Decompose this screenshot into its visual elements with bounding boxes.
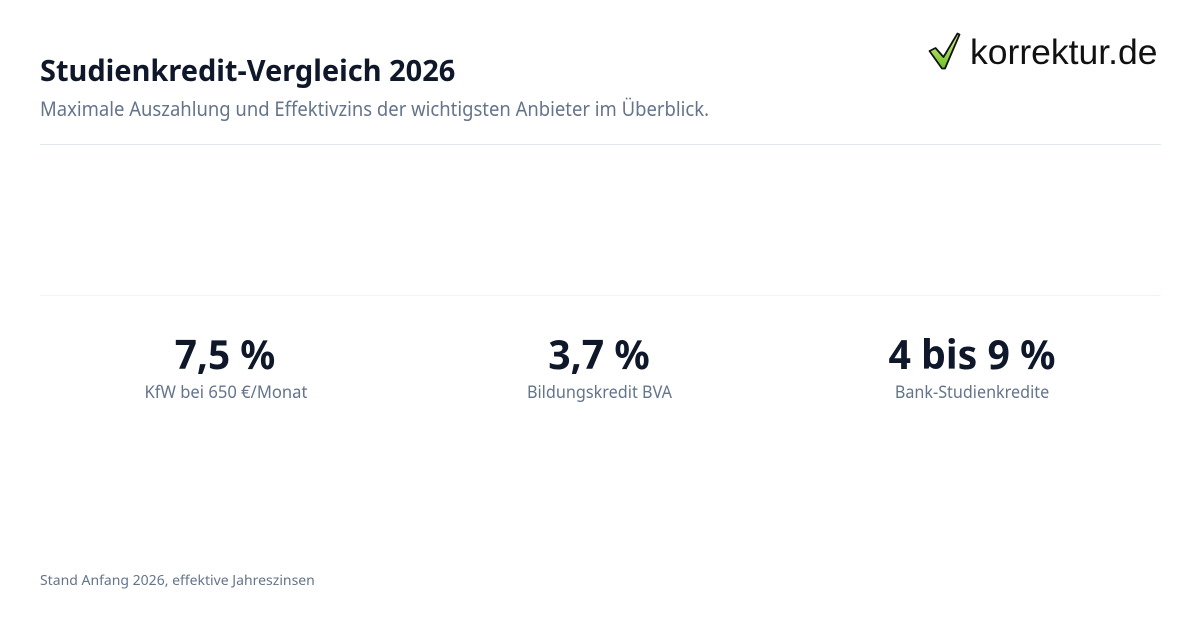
stat label: Bildungskredit BVA — [527, 380, 672, 403]
subtitle: Maximale Auszahlung und Effektivzins der wichtigsten Anbieter im Überblick. — [40, 95, 709, 122]
stat value: 4 bis 9 % — [889, 326, 1055, 381]
stat: Banks — [889, 326, 1055, 403]
stat value: 3,7 % — [548, 326, 650, 381]
logo wordmark: korrektur.de — [970, 32, 1157, 72]
stat value: 7,5 % — [175, 326, 275, 381]
footer note: Stand Anfang 2026, effektive Jahreszinsen — [40, 571, 315, 590]
icon: green check mark — [928, 32, 960, 70]
stat label: Bank-Studienkredite — [895, 380, 1049, 403]
stat: BVA — [527, 326, 672, 403]
title: Studienkredit-Vergleich 2026 — [40, 49, 455, 90]
stat: KfW — [145, 326, 308, 403]
stat label: KfW bei 650 €/Monat — [145, 380, 307, 403]
logo: korrektur.de — [928, 32, 1157, 72]
